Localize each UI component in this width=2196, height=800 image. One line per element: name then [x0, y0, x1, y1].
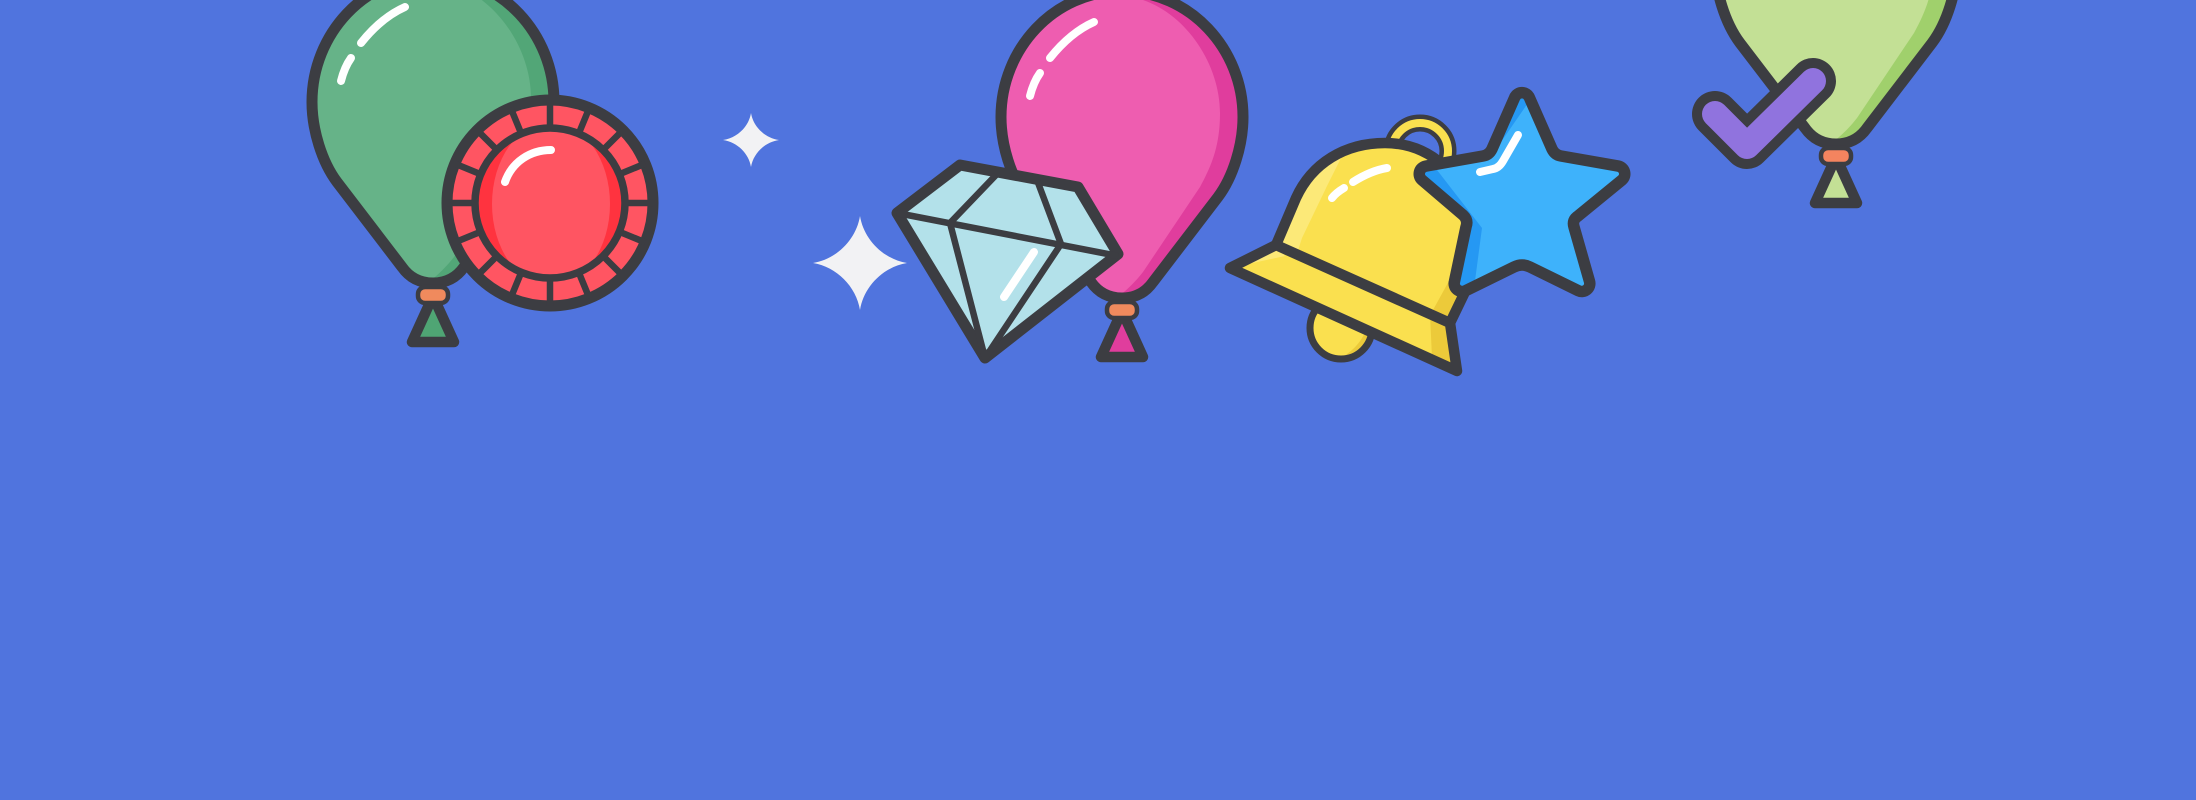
star highlight [1480, 135, 1518, 172]
green balloon body [293, 0, 554, 300]
pink balloon body [982, 0, 1243, 315]
bell clapper [1306, 310, 1374, 362]
light green balloon knot [1821, 148, 1851, 164]
diamond highlight [1004, 252, 1034, 297]
star light area [1437, 106, 1619, 286]
icon: purple check mark [1715, 81, 1813, 146]
light green balloon tail [1815, 157, 1857, 203]
green balloon knot [418, 287, 448, 303]
light green balloon body [1714, 0, 1958, 148]
green balloon tail [412, 296, 454, 342]
bell highlight [1332, 168, 1387, 198]
pink balloon highlight [1030, 22, 1094, 96]
icon: diamond [897, 165, 1118, 358]
chip spokes [447, 100, 653, 306]
green balloon highlight [341, 7, 405, 81]
diamond facets [897, 175, 1118, 358]
star fill [1419, 93, 1625, 292]
icon: pink balloon [982, 0, 1243, 357]
icon: small sparkle [723, 113, 779, 167]
icon: large sparkle [813, 216, 907, 310]
diamond body [897, 165, 1118, 358]
chip highlight [505, 150, 551, 182]
bell dome [1270, 143, 1478, 325]
icon: light green balloon [1696, 0, 1957, 203]
icon: blue star [1419, 90, 1640, 320]
bell handle ring [1392, 123, 1448, 179]
chip outer ring [447, 100, 653, 306]
pink balloon knot [1107, 302, 1137, 318]
chip centre disk [475, 128, 625, 278]
icon: yellow bell [1230, 123, 1478, 372]
icon: red poker chip [447, 100, 653, 306]
star outline [1419, 93, 1625, 292]
bell brim [1230, 245, 1460, 372]
pink balloon tail [1101, 311, 1143, 357]
icon: green balloon [293, 0, 554, 342]
